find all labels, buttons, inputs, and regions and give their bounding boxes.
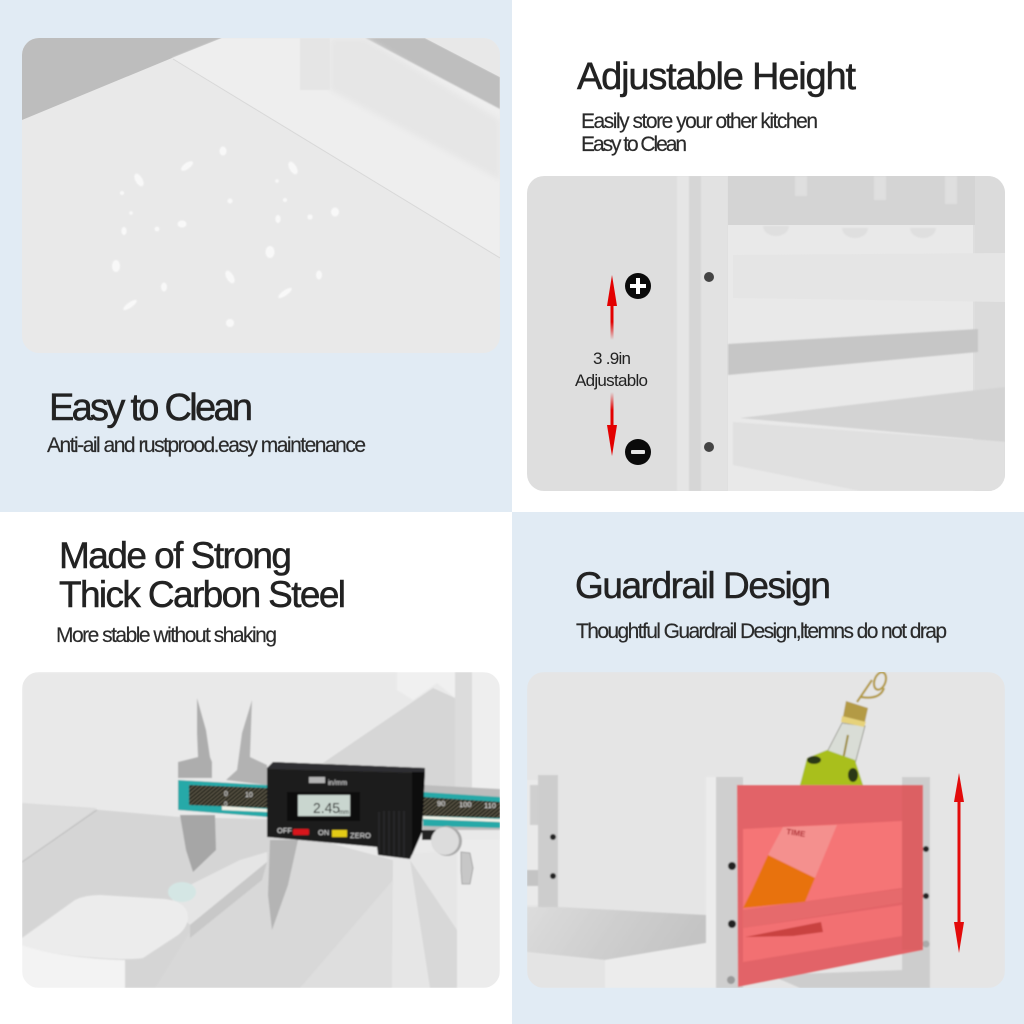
teal reflection: [168, 882, 196, 902]
bottle pull ring: [857, 671, 888, 702]
shelf front left: [527, 952, 605, 988]
bottle pour rod: [838, 735, 848, 785]
heading: guardrail design: Guardrail Design: [575, 565, 831, 606]
caliper upper jaws: [178, 698, 212, 778]
guard triangle upper: [320, 688, 455, 790]
screen frame: [287, 792, 360, 821]
heading: adjustable height: Adjustable Height: [577, 56, 856, 98]
rear table plate: [90, 808, 94, 809]
bottle shoulder oil: [800, 750, 863, 785]
off button: [293, 829, 309, 835]
LCD screen: [298, 795, 350, 816]
arrow: up: [607, 275, 617, 340]
photo blur wrapper: [527, 671, 1005, 988]
plate seam: [173, 59, 500, 258]
lock knob: [422, 826, 462, 856]
label: 3.9in adjustable: 3 .9in: [593, 349, 631, 368]
caliper scale right: 110: [484, 801, 496, 810]
upper post light: [397, 672, 455, 700]
caliper scale right: [437, 799, 496, 810]
shelf surface base: [22, 38, 500, 353]
text: easy to clean description: Anti-ail and rustprood.easy maintenance: [47, 434, 366, 457]
on button: [332, 830, 347, 837]
label text: TIME: [786, 827, 807, 839]
heading: easy to clean: Easy to Clean: [49, 387, 253, 429]
lower jaw behind: [268, 840, 298, 930]
unit button: [309, 777, 325, 783]
bottle cap ring: [841, 716, 866, 727]
bottle oil: [743, 855, 815, 908]
hooks: [763, 176, 957, 238]
LCD unit: mm: [339, 810, 349, 816]
photo blur wrapper: [22, 672, 500, 988]
table seam: [22, 810, 97, 862]
guard main panel: [300, 840, 393, 986]
panel: adjustable height photo: [527, 176, 1005, 491]
blurred post reflection: [301, 39, 327, 89]
white pad: [22, 895, 188, 959]
caliper body top: [267, 762, 425, 773]
heading: made of strong thick carbon steel: Made of Strong: [59, 535, 292, 576]
vertical post: [677, 176, 728, 491]
thumb roller: [379, 811, 404, 857]
left rack post: [527, 775, 558, 907]
oil bottle upper: [800, 671, 888, 785]
dark backdrop left: [22, 38, 222, 120]
arrow: down: [607, 392, 617, 456]
text: steel description: More stable without shaking: [56, 624, 277, 647]
panel base: [527, 176, 1005, 491]
shelf tray front: [734, 423, 973, 490]
caliper right beam: [423, 785, 500, 830]
text: adjustable height description: Easy to Clean: [581, 133, 687, 156]
lower post: [392, 850, 457, 988]
bottle cap: [842, 701, 868, 726]
dark backdrop right: [365, 38, 500, 109]
unit label: in/mm: [328, 780, 347, 787]
backdrop: [22, 672, 500, 860]
table surface: [22, 803, 300, 988]
heading: made of strong thick carbon steel: [59, 535, 346, 615]
caliper: [178, 698, 500, 884]
bottle neck glass: [827, 723, 865, 764]
red guardrail overlay: [737, 785, 923, 987]
red lower window: [743, 905, 902, 962]
background: top-left blue quadrant: [0, 0, 512, 512]
caliper left beam: [178, 780, 267, 817]
caliper scale right: 100: [459, 800, 472, 809]
text: adjustable height description: [581, 110, 818, 156]
red overlay base: [737, 785, 923, 987]
right backdrop: [472, 672, 500, 802]
caliper scale left: 0: [224, 802, 228, 808]
label: 3.9in adjustable: [575, 349, 648, 390]
shelf reflection: [745, 922, 823, 937]
bottle label: [768, 825, 837, 878]
right post: [989, 176, 1005, 192]
off label: OFF: [277, 826, 292, 835]
icon: minus: [625, 439, 651, 465]
middle gray bar: [728, 329, 978, 375]
caliper lower jaw: [180, 815, 216, 872]
double arrow: guardrail height: [954, 773, 964, 953]
zero label: ZERO: [350, 831, 371, 840]
shelf tray top: [744, 390, 975, 439]
bottle dark patches: [807, 756, 858, 782]
panel: guardrail photo: [527, 671, 1005, 988]
inner back board: [728, 225, 973, 491]
icon: plus: [625, 273, 651, 299]
guard reflection: [368, 38, 380, 46]
label: 3.9in adjustable: Adjustablo: [575, 371, 648, 390]
caliper scale left: 0: [224, 791, 228, 798]
rear shelf plate: [172, 38, 222, 58]
red lower band: [743, 888, 910, 928]
heading: made of strong thick carbon steel: Thick Carbon Steel: [59, 574, 346, 615]
caliper scale right: 90: [437, 799, 445, 808]
LCD reading: 2.45: [313, 800, 340, 817]
water droplets: [112, 146, 339, 327]
backdrop: [527, 672, 1005, 988]
right post: [902, 777, 930, 988]
clip: [461, 852, 473, 884]
bolts: [704, 272, 714, 452]
on label: ON: [318, 828, 329, 837]
guard lighter fold: [300, 880, 393, 988]
caliper right side shade: [412, 772, 425, 855]
shelf top: [527, 907, 706, 960]
text: adjustable height description: Easily store your other kitchen: [581, 110, 818, 133]
shelf front right: [605, 943, 706, 988]
panel: carbon steel photo with caliper: [22, 672, 500, 988]
red right strip: [902, 785, 923, 950]
red overlay window: [743, 821, 902, 910]
upper guard bar: [975, 253, 1005, 302]
lower strut: [770, 970, 902, 988]
caliper scale left: 10: [245, 792, 253, 799]
pad lip: [22, 945, 125, 988]
text: guardrail description: Thoughtful Guardrail Design,ltemns do not drap: [576, 620, 947, 643]
panel: easy to clean photo: [22, 38, 500, 353]
caliper scale left: [224, 791, 253, 808]
back upper band: [728, 176, 978, 225]
caliper body: [267, 762, 425, 859]
upper right corner: [425, 38, 500, 77]
guard rail top: [170, 852, 267, 925]
upper post side: [455, 672, 472, 788]
background: bottom-right blue quadrant: [512, 512, 1024, 1024]
center post: [706, 777, 743, 988]
